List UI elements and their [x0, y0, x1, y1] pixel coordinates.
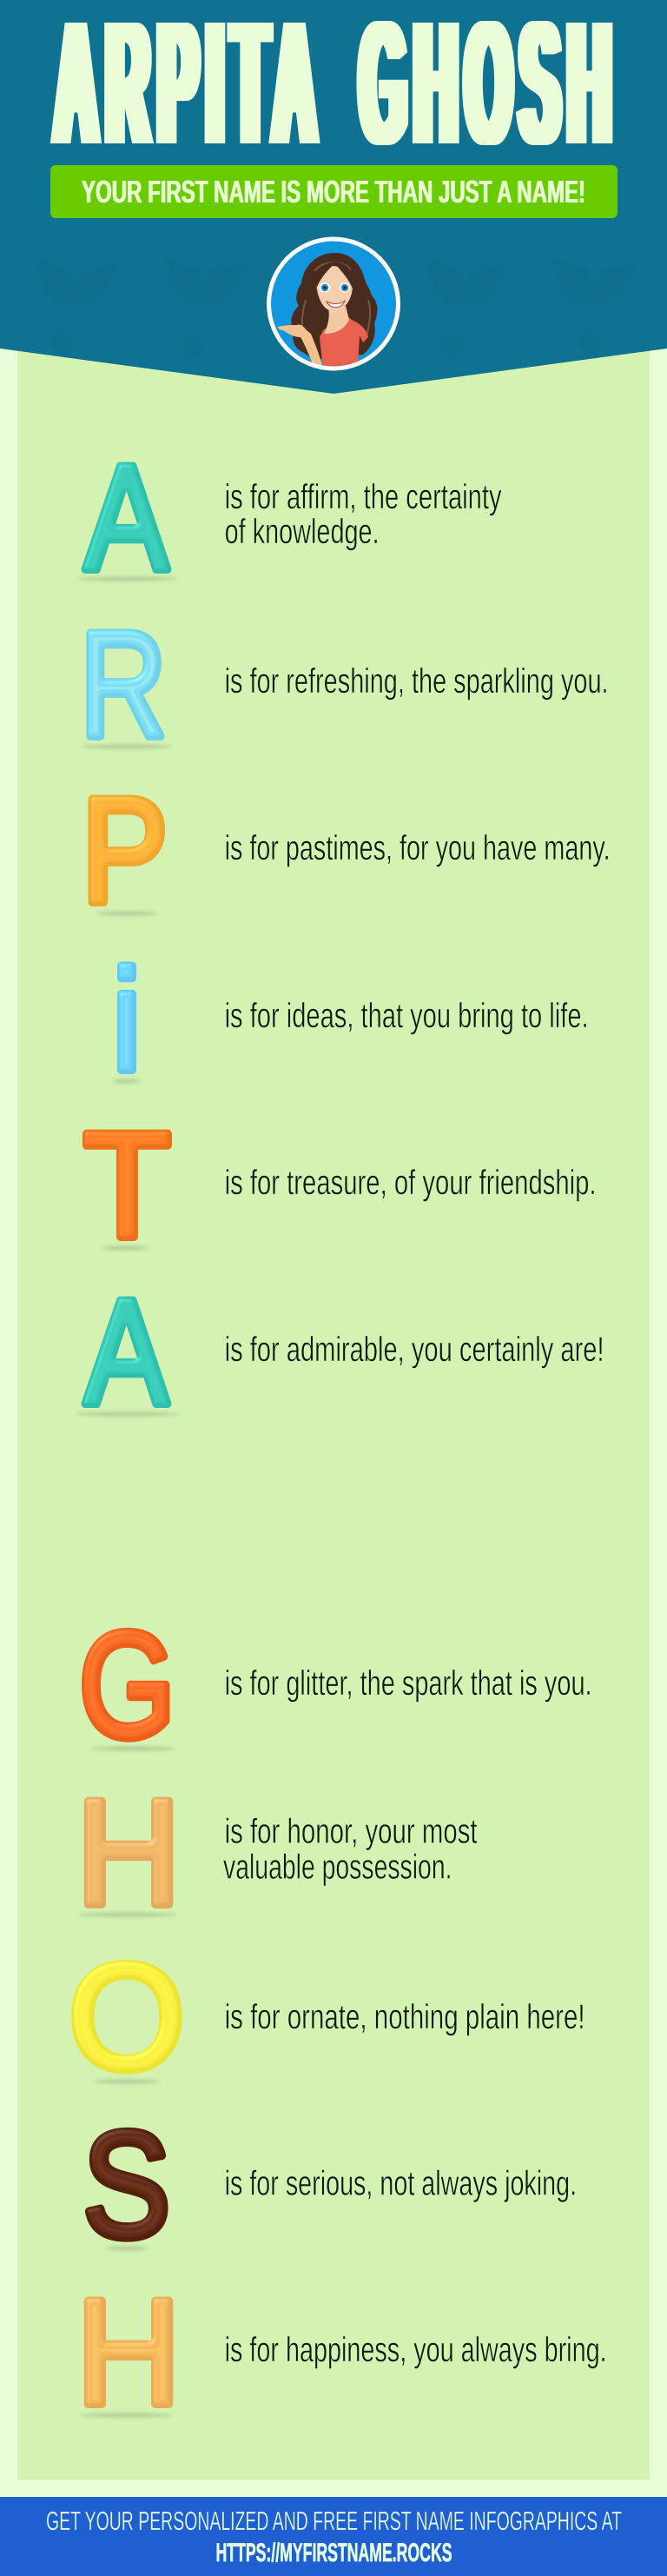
row: I: [113, 940, 589, 1100]
row: P: [82, 767, 611, 934]
panel: letters background: [17, 343, 650, 2480]
caption: is for honor, your most: [225, 1813, 478, 1851]
row: H: valuable possession.: [223, 1848, 452, 1886]
letter i: i: [113, 940, 141, 1100]
row: R: [80, 601, 609, 768]
letter S: S: [83, 2101, 170, 2268]
row: A: of knowledge.: [225, 513, 380, 551]
row: H: [76, 1769, 478, 1936]
caption: is for affirm, the certainty: [225, 478, 502, 516]
row: H second: [76, 2269, 607, 2436]
row: O: [69, 1934, 585, 2101]
letter P: P: [82, 767, 168, 934]
title: [55, 0, 619, 181]
row: A second: [75, 1269, 604, 1436]
letter A: A: [85, 435, 168, 601]
icon: portrait of smiling woman: [267, 236, 400, 370]
letter H: H: [76, 2269, 181, 2436]
footer: [0, 2497, 667, 2576]
header band: [0, 0, 667, 394]
letter G: G: [79, 1602, 175, 1769]
header texture: faint butterflies: [36, 258, 635, 356]
row: G: [79, 1602, 592, 1769]
row: T: [83, 1102, 597, 1269]
row: A: [76, 435, 502, 601]
row: S: [83, 2101, 577, 2268]
letter H: H: [76, 1769, 181, 1936]
subtitle banner: [50, 165, 617, 218]
letter T: T: [83, 1102, 171, 1269]
letter R: R: [80, 601, 167, 768]
letter O: O: [69, 1934, 185, 2101]
footer: HTTPS://MYFIRSTNAME.ROCKS: [215, 2539, 452, 2567]
letter A: A: [85, 1269, 168, 1436]
shadow: [76, 577, 177, 581]
